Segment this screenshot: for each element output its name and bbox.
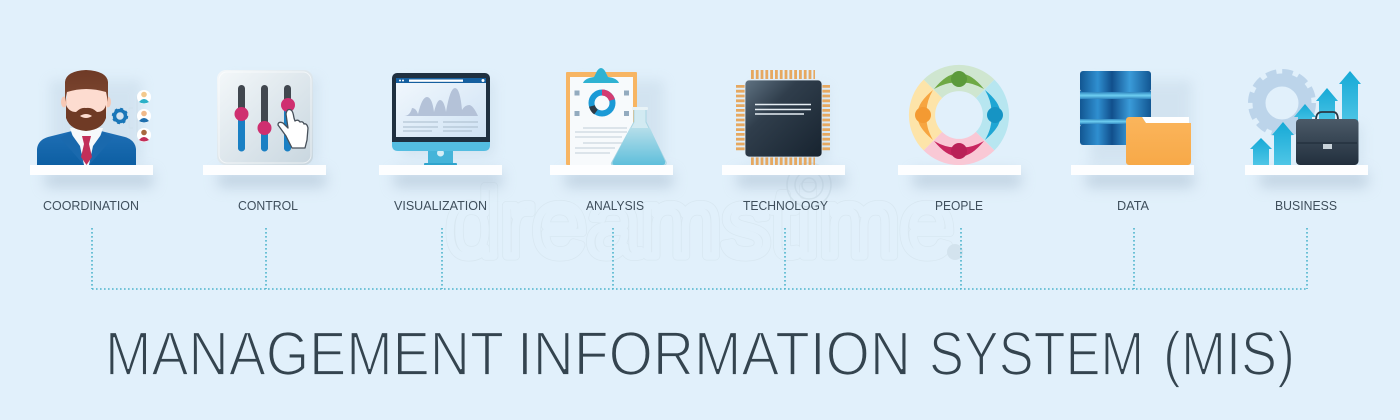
title: (MIS)	[1163, 320, 1295, 389]
icon: technology chip	[740, 74, 826, 161]
donut chart	[592, 92, 612, 114]
icon: data	[1080, 71, 1191, 165]
ring segments	[924, 65, 994, 98]
beard	[66, 105, 106, 131]
text lines	[403, 122, 478, 131]
gear	[1259, 80, 1305, 126]
pins	[740, 74, 826, 161]
team avatars	[137, 90, 151, 104]
icon: coordination manager	[37, 70, 151, 165]
orange person	[915, 90, 933, 140]
icon: control sliders	[217, 70, 313, 165]
icon soft shadows	[50, 78, 1362, 165]
title: INFORMATION	[517, 320, 911, 389]
labels: CONTROL	[238, 198, 298, 213]
labels: TECHNOLOGY	[743, 198, 828, 213]
board	[566, 72, 637, 165]
green person	[934, 71, 984, 89]
arrows	[1250, 138, 1272, 165]
magenta person	[934, 141, 984, 159]
database	[1080, 91, 1151, 100]
slider fill	[238, 113, 245, 152]
jacket	[37, 131, 136, 165]
slider tracks	[238, 85, 245, 151]
icon: business	[1250, 71, 1361, 165]
briefcase	[1296, 119, 1358, 165]
connector lines	[129, 97, 144, 135]
labels: VISUALIZATION	[394, 198, 487, 213]
icon: analysis clipboard	[566, 68, 666, 165]
title: MANAGEMENT	[105, 320, 504, 389]
labels	[43, 198, 1337, 213]
hand cursor	[278, 110, 308, 148]
ears	[61, 96, 67, 108]
paper	[570, 77, 633, 165]
tie	[81, 136, 92, 165]
shelf shadows	[45, 172, 1368, 187]
labels: PEOPLE	[935, 198, 983, 213]
clip	[583, 68, 619, 83]
dotted connector	[92, 228, 1308, 289]
markers	[574, 90, 629, 116]
watermark: dreamstime	[446, 170, 954, 277]
labels: BUSINESS	[1275, 198, 1337, 213]
title	[105, 320, 1295, 389]
blue person	[985, 90, 1003, 140]
title: SYSTEM	[929, 320, 1144, 389]
shelves	[30, 165, 1368, 175]
labels: DATA	[1117, 198, 1149, 213]
icon: people circle	[909, 65, 1009, 165]
gear	[114, 110, 126, 122]
labels: COORDINATION	[43, 198, 139, 213]
shirt collar	[70, 128, 103, 165]
panel	[217, 70, 313, 165]
area chart	[404, 88, 478, 116]
chip lines	[755, 104, 811, 114]
watermark: dreamstime	[446, 170, 954, 277]
face	[67, 88, 107, 125]
stand	[428, 151, 453, 163]
handle	[1316, 112, 1338, 120]
text lines	[575, 128, 627, 153]
monitor body	[392, 73, 490, 142]
chip body	[745, 80, 822, 157]
icon: visualization monitor	[392, 73, 490, 166]
screen	[396, 78, 486, 137]
hair	[65, 70, 108, 102]
flask	[611, 108, 666, 165]
knobs	[234, 107, 248, 121]
folder	[1126, 117, 1191, 165]
labels: ANALYSIS	[586, 198, 644, 213]
